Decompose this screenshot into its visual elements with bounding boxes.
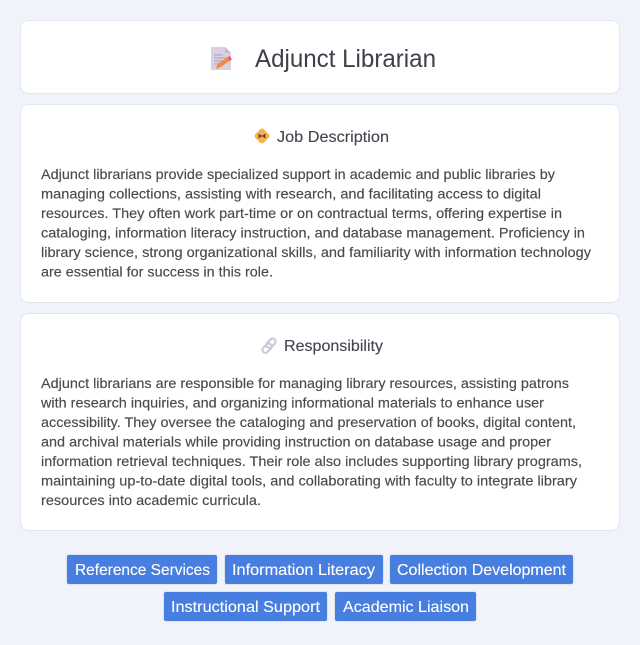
tag: information literacy (224, 554, 384, 584)
tag: information literacy: Information Literacy (232, 562, 375, 579)
text block: job description: resources. They often work part-time or on contractual terms, offering expertise in (41, 205, 562, 221)
icon: diamond sign (254, 128, 270, 144)
text block: responsibility: accessibility. They oversee the cataloging and preservation of books, digital content, (41, 414, 576, 430)
tag: reference services (66, 554, 218, 584)
text block: responsibility: information retrieval techniques. Their role also includes supporting library programs, (41, 453, 582, 469)
tag: collection development: Collection Development (397, 562, 567, 579)
text block: responsibility: Adjunct librarians are responsible for managing library resources, assisting patrons (41, 375, 569, 391)
panel: title card (20, 20, 620, 94)
text block: responsibility: and archival materials while providing instruction on database usage and proper (41, 434, 551, 450)
panel: job description (20, 104, 620, 302)
text block: job description: managing collections, assisting with research, and facilitating access to digital (41, 186, 541, 202)
text block: responsibility: with research inquiries, and organizing informational materials to enhance user (40, 394, 544, 410)
text block: job description: are essential for success in this role. (41, 264, 273, 280)
text block: responsibility: resources into academic curricula. (41, 492, 261, 508)
panel: responsibility (20, 314, 620, 530)
text block: job description: library science, strong organizational skills, and familiarity with information technology (41, 244, 591, 260)
text block: job description: cataloging, information literacy instruction, and database management. Proficiency in (41, 224, 585, 240)
tag: academic liaison (334, 592, 476, 622)
text block: job description: Adjunct librarians provide specialized support in academic and public libraries by (41, 166, 555, 182)
title: Adjunct Librarian (255, 45, 436, 73)
tag: instructional support: Instructional Support (171, 599, 321, 616)
tag: academic liaison: Academic Liaison (343, 599, 469, 616)
icon: chain link (261, 337, 277, 354)
text block: responsibility (40, 375, 582, 508)
text block: job description (41, 166, 591, 280)
heading: job description: Job Description (277, 129, 389, 146)
tag: collection development (390, 554, 574, 584)
heading: responsibility: Responsibility (284, 338, 383, 355)
icon: document with pencil (211, 47, 232, 70)
tag: reference services: Reference Services (75, 562, 210, 579)
tag: instructional support (164, 592, 328, 622)
text block: responsibility: maintaining up-to-date digital tools, and collaborating with faculty to integrate library (41, 472, 577, 488)
